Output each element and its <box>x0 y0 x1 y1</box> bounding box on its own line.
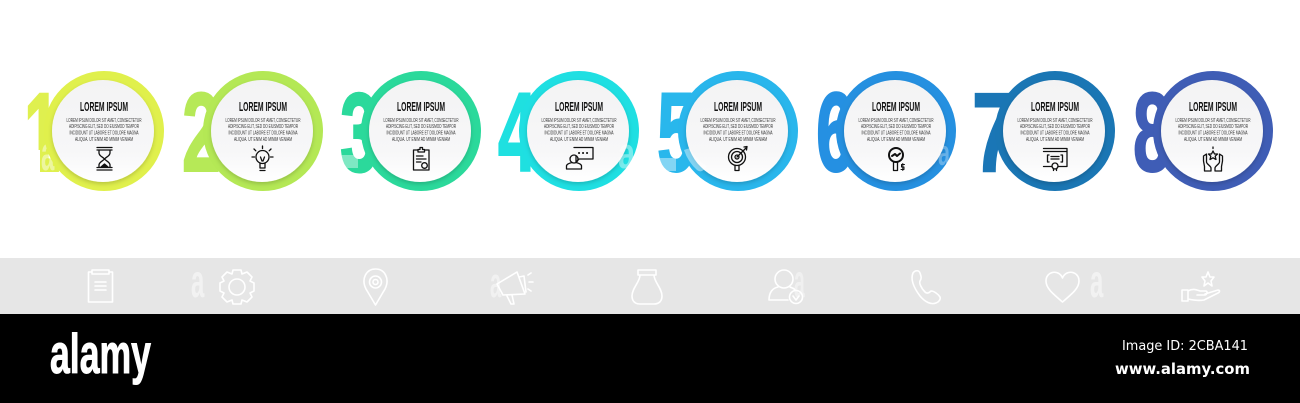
icon: map pin outline <box>364 269 387 305</box>
text block 4: ADIPISCING ELIT, SED DO EIUSMOD TEMPOR <box>544 124 614 130</box>
inner disc 2 <box>211 80 313 182</box>
text block 2: ADIPISCING ELIT, SED DO EIUSMOD TEMPOR <box>228 124 298 130</box>
text block 6: ALIQUA. UT ENIM AD MINIM VENIAM <box>867 137 925 143</box>
text block 1 <box>66 118 142 143</box>
text block 6: INCIDIDUNT UT LABORE ET DOLORE MAGNA <box>862 131 931 137</box>
text block 8: LOREM IPSUM DOLOR SIT AMET, CONSECTETUR <box>1176 118 1251 124</box>
text block 3 <box>384 118 459 143</box>
digit 1: 1 <box>24 71 60 195</box>
text block 6: LOREM IPSUM DOLOR SIT AMET, CONSECTETUR <box>858 118 934 124</box>
icon: phone outline <box>912 271 940 304</box>
text block 2: LOREM IPSUM DOLOR SIT AMET, CONSECTETUR <box>226 118 301 124</box>
icon: magnifier with dollar <box>889 148 904 170</box>
icon: light bulb <box>252 146 273 170</box>
text block 7 <box>1018 118 1093 143</box>
heading 2: LOREM IPSUM <box>239 100 287 114</box>
step 1 <box>24 71 164 195</box>
watermark letter on person: a <box>794 257 805 307</box>
heading 6: LOREM IPSUM <box>872 100 920 114</box>
ring 7 <box>995 71 1115 191</box>
watermark fragment 4: a <box>618 130 636 178</box>
icon: gear outline <box>220 270 254 304</box>
icon: heart outline <box>1046 272 1079 302</box>
icon: person with speech bubble <box>566 148 593 169</box>
text block 6 <box>858 118 934 143</box>
heading 1: LOREM IPSUM <box>80 100 128 114</box>
heading 4: LOREM IPSUM <box>555 100 603 114</box>
watermark fragment 3 <box>341 155 358 168</box>
digit 7: 7 <box>972 70 1017 195</box>
inner disc 8 <box>1161 80 1263 182</box>
step 5 <box>657 70 798 195</box>
step 6 <box>816 70 956 195</box>
logo: alamy: alamy <box>50 322 151 385</box>
text block 8: INCIDIDUNT UT LABORE ET DOLORE MAGNA <box>1178 131 1248 137</box>
ring 3 <box>361 71 481 191</box>
panel: black footer <box>0 314 1300 403</box>
text block 1: ALIQUA. UT ENIM AD MINIM VENIAM <box>75 137 133 143</box>
digit 8: 8 <box>1133 70 1172 195</box>
text block 3: LOREM IPSUM DOLOR SIT AMET, CONSECTETUR <box>384 118 459 124</box>
ring 6 <box>836 71 956 191</box>
panel: grey icon band <box>0 256 1300 314</box>
watermark fragment 6: a <box>938 133 950 173</box>
digit 2: 2 <box>182 70 221 195</box>
digit 5: 5 <box>657 70 696 195</box>
step 3 <box>340 70 481 195</box>
heading 5: LOREM IPSUM <box>714 100 762 114</box>
text block 5: INCIDIDUNT UT LABORE ET DOLORE MAGNA <box>704 131 773 137</box>
text block 3: ALIQUA. UT ENIM AD MINIM VENIAM <box>392 137 450 143</box>
step 7 <box>972 70 1115 195</box>
text block 6: ADIPISCING ELIT, SED DO EIUSMOD TEMPOR <box>861 124 931 130</box>
text block 1: INCIDIDUNT UT LABORE ET DOLORE MAGNA <box>70 131 139 137</box>
inner disc 1 <box>52 80 154 182</box>
text block 5: LOREM IPSUM DOLOR SIT AMET, CONSECTETUR <box>700 118 776 124</box>
watermark fragment 1: a <box>41 128 55 181</box>
step 4 <box>498 70 639 195</box>
digit 3: 3 <box>340 70 379 195</box>
text block 4: INCIDIDUNT UT LABORE ET DOLORE MAGNA <box>544 131 614 137</box>
text block 8: ADIPISCING ELIT, SED DO EIUSMOD TEMPOR <box>1178 124 1248 130</box>
ring 1 <box>44 71 164 191</box>
icon: megaphone outline <box>497 272 533 304</box>
text block 2: INCIDIDUNT UT LABORE ET DOLORE MAGNA <box>228 131 298 137</box>
icon: hand with star outline <box>1182 272 1220 301</box>
watermark fragment 5 <box>660 148 707 171</box>
text block 8 <box>1176 118 1251 143</box>
text block 1: ADIPISCING ELIT, SED DO EIUSMOD TEMPOR <box>69 124 139 130</box>
inner disc 3 <box>369 80 471 182</box>
text block 4 <box>542 118 617 143</box>
ring 8 <box>1153 71 1273 191</box>
step 8 <box>1133 70 1273 195</box>
text block 5: ALIQUA. UT ENIM AD MINIM VENIAM <box>709 137 767 143</box>
icon: clipboard outline <box>88 270 112 302</box>
inner disc 7 <box>1003 80 1105 182</box>
text block 1: LOREM IPSUM DOLOR SIT AMET, CONSECTETUR <box>66 118 142 124</box>
icon: person with badge outline <box>769 270 802 304</box>
heading 3: LOREM IPSUM <box>397 100 445 114</box>
ring 4 <box>519 71 639 191</box>
text block 5: ADIPISCING ELIT, SED DO EIUSMOD TEMPOR <box>703 124 773 130</box>
text block 3: ADIPISCING ELIT, SED DO EIUSMOD TEMPOR <box>386 124 456 130</box>
heading 7: LOREM IPSUM <box>1031 100 1079 114</box>
icon: hands holding star <box>1204 147 1222 171</box>
text block 7: INCIDIDUNT UT LABORE ET DOLORE MAGNA <box>1020 131 1090 137</box>
text block 4: ALIQUA. UT ENIM AD MINIM VENIAM <box>550 137 608 143</box>
watermark letter left: a <box>191 256 205 307</box>
inner disc 5 <box>686 80 788 182</box>
ring 5 <box>678 71 798 191</box>
icon: certificate <box>1044 148 1067 170</box>
icon: target <box>728 146 747 170</box>
heading 8: LOREM IPSUM <box>1189 100 1237 114</box>
text block 4: LOREM IPSUM DOLOR SIT AMET, CONSECTETUR <box>542 118 617 124</box>
digit 4: 4 <box>498 70 537 195</box>
icon: hourglass <box>97 148 112 170</box>
watermark letter on megaphone: a <box>490 259 502 306</box>
text block 7: LOREM IPSUM DOLOR SIT AMET, CONSECTETUR <box>1018 118 1093 124</box>
image id: Image ID: 2CBA141 <box>1122 338 1248 354</box>
text block 7: ADIPISCING ELIT, SED DO EIUSMOD TEMPOR <box>1020 124 1090 130</box>
step 2 <box>182 70 323 195</box>
inner disc 4 <box>527 80 629 182</box>
digit 6: 6 <box>816 70 855 195</box>
website: www.alamy.com <box>1115 360 1250 378</box>
text block 2 <box>226 118 301 143</box>
icon: money bag outline <box>632 270 662 304</box>
text block 5 <box>700 118 776 143</box>
watermark letter right: a <box>1090 256 1104 307</box>
text block 7: ALIQUA. UT ENIM AD MINIM VENIAM <box>1026 137 1084 143</box>
text block 3: INCIDIDUNT UT LABORE ET DOLORE MAGNA <box>386 131 456 137</box>
text block 2: ALIQUA. UT ENIM AD MINIM VENIAM <box>234 137 292 143</box>
text block 8: ALIQUA. UT ENIM AD MINIM VENIAM <box>1184 137 1242 143</box>
icon: clipboard <box>414 148 429 170</box>
ring 2 <box>203 71 323 191</box>
inner disc 6 <box>844 80 946 182</box>
